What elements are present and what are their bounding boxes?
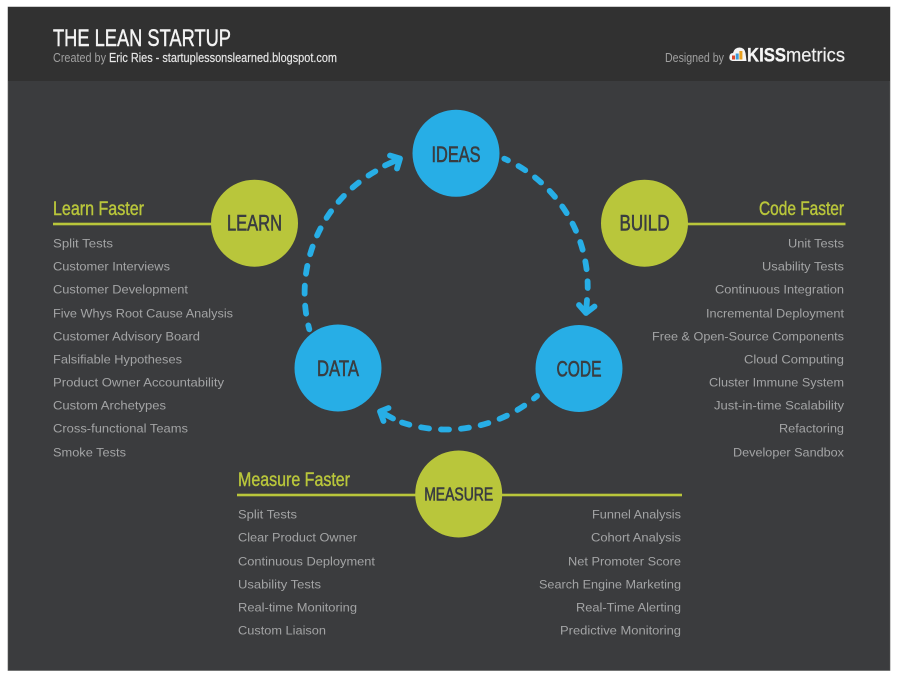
subtitle: credit: Created by (53, 50, 106, 65)
node: code (536, 325, 622, 412)
KISSmetrics wordmark: metrics (786, 44, 845, 66)
arrow: ideas to code (504, 159, 594, 313)
list: build items: Usability Tests (762, 259, 844, 273)
list: measure items right: Search Engine Marketing (539, 577, 681, 591)
node: build: BUILD (620, 210, 670, 236)
list: build items: Cluster Immune System (709, 375, 844, 389)
heading: learn faster: Learn Faster (53, 199, 145, 220)
KISSmetrics wordmark: KISS (747, 44, 786, 66)
list: build items: Developer Sandbox (733, 445, 845, 459)
list: measure items right (539, 507, 681, 637)
node: measure: MEASURE (424, 484, 493, 504)
list: measure items left (238, 507, 376, 637)
node: ideas: IDEAS (432, 142, 480, 167)
panel: measure faster (237, 450, 682, 637)
list: learn items: Customer Interviews (53, 259, 170, 273)
list: measure items left: Real-time Monitoring (238, 600, 357, 614)
node: learn: LEARN (227, 210, 282, 236)
list: measure items left: Custom Liaison (238, 623, 326, 637)
list: measure items right: Predictive Monitoring (560, 623, 681, 637)
list: build items: Continuous Integration (715, 282, 844, 296)
node: code: CODE (556, 357, 602, 382)
node: measure (415, 450, 502, 538)
list: build items: Just-in-time Scalability (714, 398, 845, 412)
list: build items: Free & Open-Source Components (652, 329, 844, 343)
list: learn items: Five Whys Root Cause Analysis (53, 306, 233, 320)
list: measure items right: Funnel Analysis (592, 507, 681, 521)
list: build items: Cloud Computing (744, 352, 844, 366)
heading: measure faster: Measure Faster (238, 470, 351, 491)
node: learn (211, 180, 298, 267)
list: learn items: Smoke Tests (53, 445, 126, 459)
panel: code faster (601, 180, 846, 459)
designed by credit: Designed by (665, 50, 724, 65)
arrow: code to data (380, 396, 537, 430)
heading: code faster: Code Faster (759, 199, 845, 220)
cycle arrows (305, 156, 594, 430)
list: learn items: Split Tests (53, 236, 113, 250)
list: learn items (53, 236, 233, 459)
arrow: data to ideas (305, 156, 400, 329)
list: measure items left: Continuous Deployment (238, 554, 376, 568)
icon: KISSmetrics logo mark (729, 48, 746, 61)
list: build items: Refactoring (779, 421, 844, 435)
list: measure items left: Clear Product Owner (238, 530, 357, 544)
list: measure items right: Net Promoter Score (568, 554, 681, 568)
list: learn items: Customer Advisory Board (53, 329, 200, 343)
panel: learn faster (53, 180, 298, 459)
header band (8, 7, 890, 81)
node: data: DATA (317, 356, 359, 381)
node: data (294, 324, 382, 412)
list: measure items right: Cohort Analysis (591, 530, 681, 544)
list: learn items: Custom Archetypes (53, 398, 166, 412)
list: measure items left: Usability Tests (238, 577, 321, 591)
list: build items: Unit Tests (788, 236, 844, 250)
list: learn items: Cross-functional Teams (53, 421, 188, 435)
list: measure items left: Split Tests (238, 507, 297, 521)
title: THE LEAN STARTUP (53, 25, 231, 52)
list: measure items right: Real-Time Alerting (576, 600, 681, 614)
list: learn items: Product Owner Accountability (53, 375, 225, 389)
node: build (601, 180, 688, 267)
list: build items: Incremental Deployment (706, 306, 845, 320)
list: learn items: Falsifiable Hypotheses (53, 352, 182, 366)
KISSmetrics wordmark (747, 44, 845, 66)
subtitle: credit (53, 50, 337, 65)
node: ideas (412, 110, 500, 197)
subtitle: credit: Eric Ries - startuplessonslearned.blogspot.com (109, 50, 337, 65)
list: build items (652, 236, 845, 459)
list: learn items: Customer Development (53, 282, 189, 296)
